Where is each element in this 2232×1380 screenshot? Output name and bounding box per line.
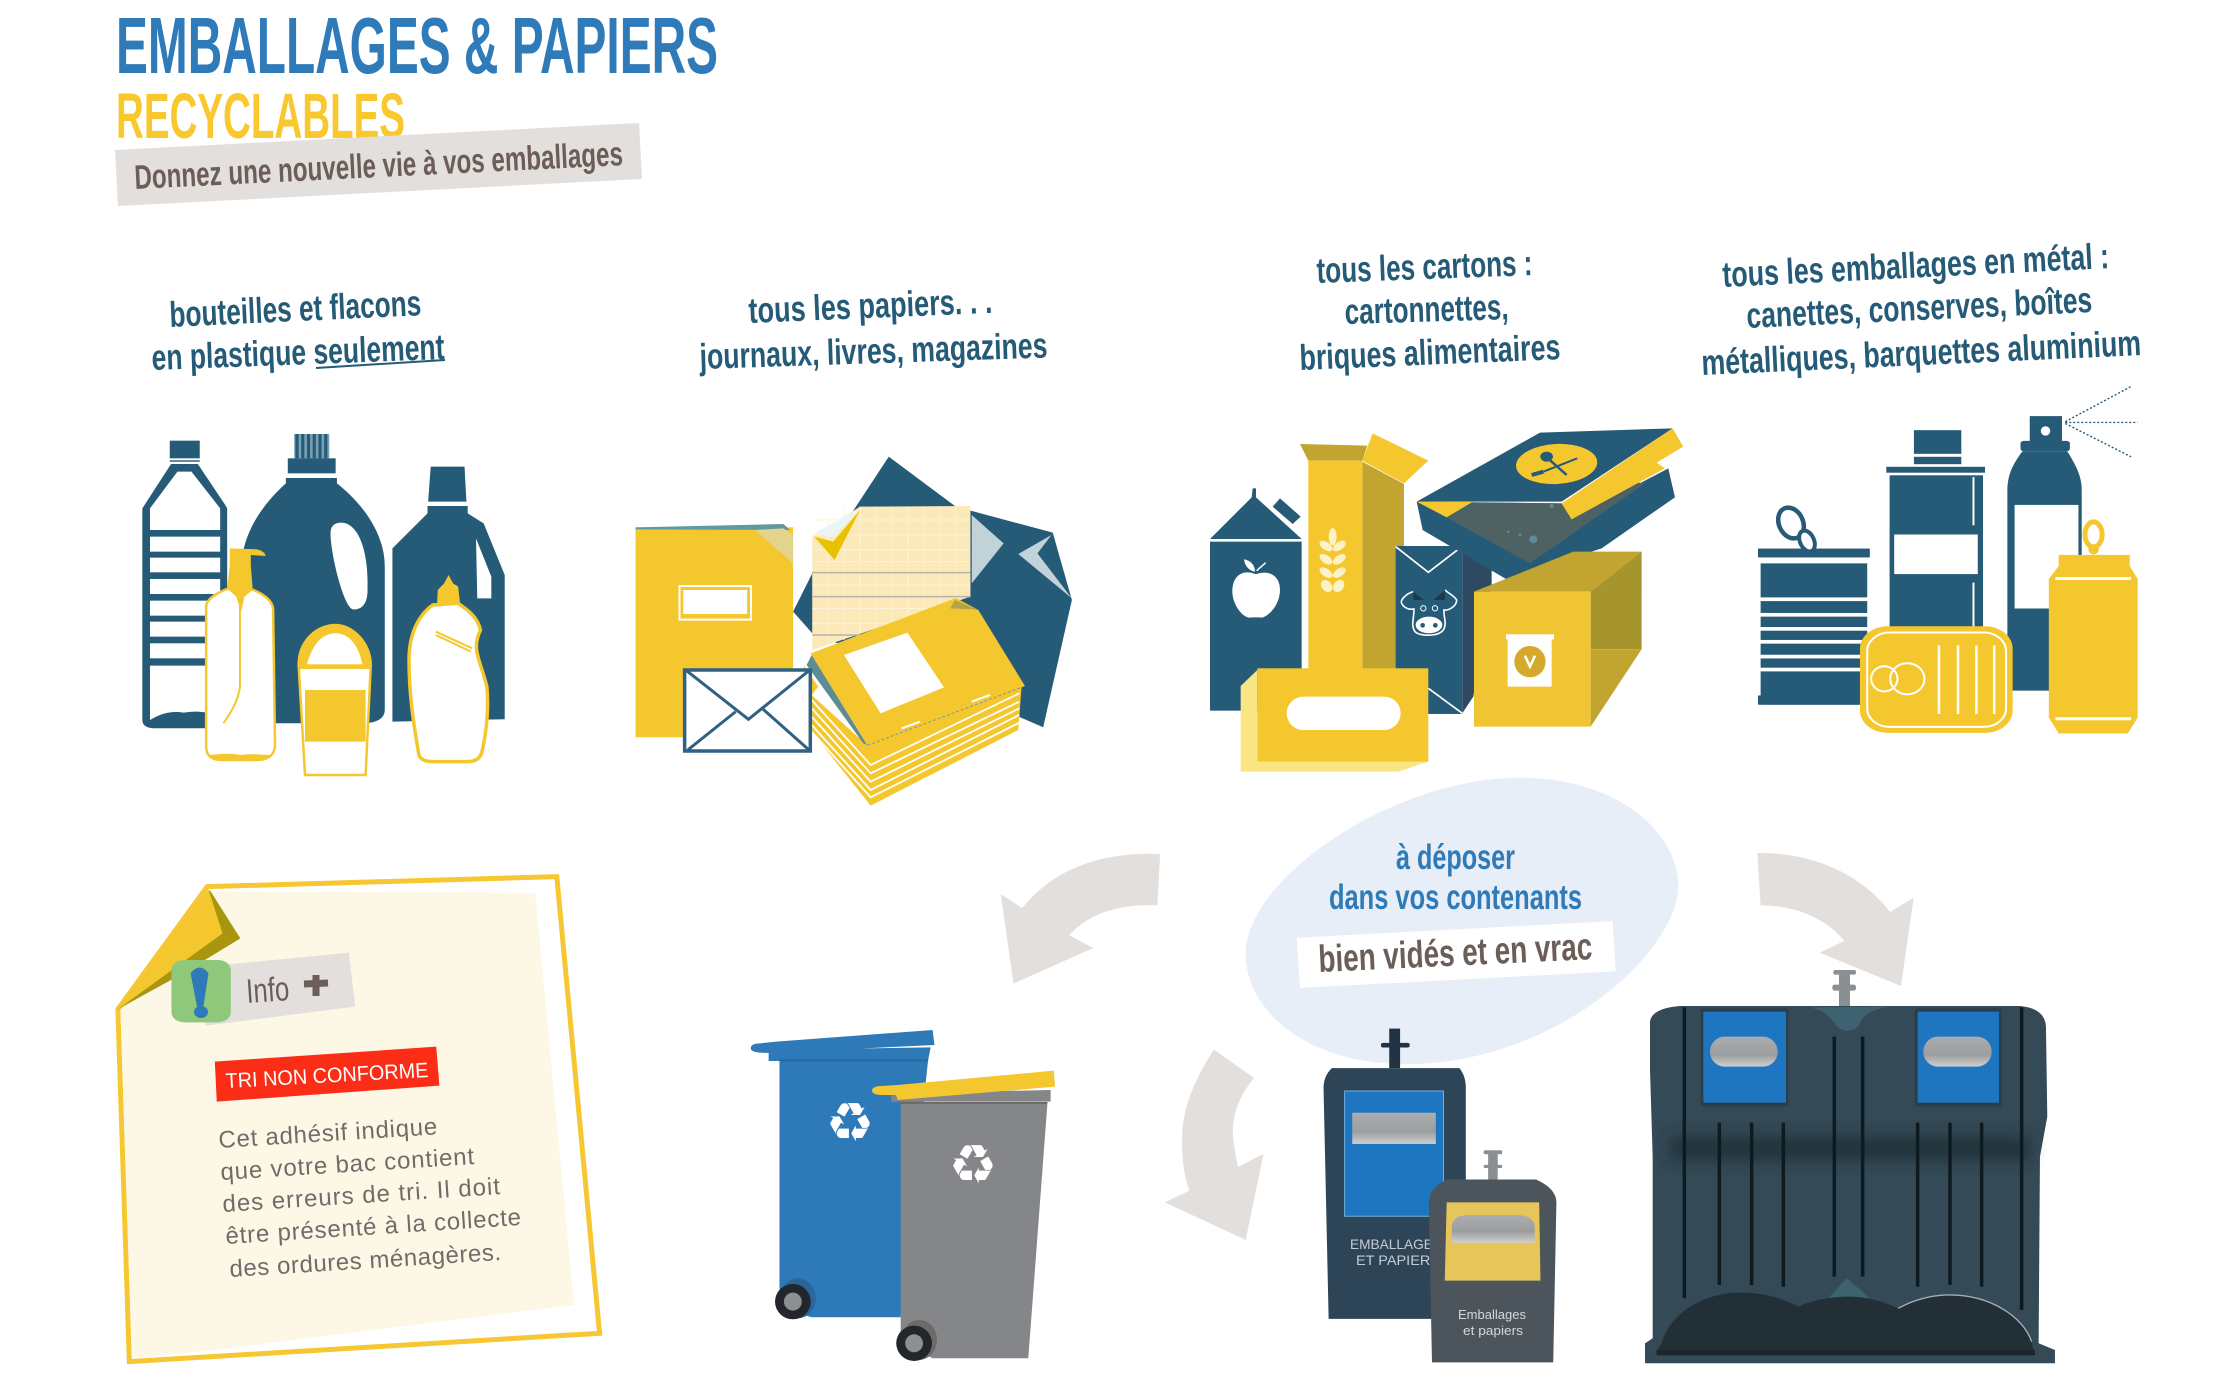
title: EMBALLAGES & PAPIERS <box>116 1 718 90</box>
label: tri non conforme <box>215 1047 439 1102</box>
icon: tall blue container <box>1324 1029 1466 1319</box>
heading: plastic: bouteilles et flacons <box>168 282 422 335</box>
heading: metal <box>1701 235 2142 383</box>
note body text: Cet adhésif indique <box>218 1113 438 1154</box>
note body text: que votre bac contient <box>220 1143 475 1186</box>
heading: cartons: briques alimentaires <box>1299 326 1561 378</box>
icon: wheeled bins: ♻ <box>826 1091 874 1154</box>
subtitle band: Donnez une nouvelle vie à vos emballages <box>134 135 624 197</box>
arrow: to small containers <box>1165 1050 1264 1240</box>
panel: speech bubble: à déposer <box>1396 838 1515 877</box>
icon: small yellow container: Emballages <box>1458 1307 1526 1322</box>
info badge: Info <box>245 970 290 1011</box>
note body text: être présenté à la collecte <box>225 1204 522 1250</box>
heading: metal: canettes, conserves, boîtes <box>1745 279 2093 336</box>
panel: speech bubble <box>1246 778 1678 1064</box>
arrow: to collective containers <box>1757 853 1914 986</box>
heading: cartons: cartonnettes, <box>1344 286 1509 332</box>
icon: tall blue container: EMBALLAGES <box>1350 1236 1442 1252</box>
heading: metal: tous les emballages en métal : <box>1721 235 2110 295</box>
icon: wheat <box>1318 528 1348 594</box>
panel: speech bubble: dans vos contenants <box>1329 878 1582 917</box>
heading: papers: tous les papiers. . . <box>748 280 993 331</box>
icon: folded corner <box>118 889 240 1009</box>
icon: cow <box>1401 590 1457 635</box>
icon: cartons <box>1210 428 1683 772</box>
icon: wheeled bins: ♻ <box>949 1133 997 1196</box>
icon: wheeled bins <box>751 1030 1055 1361</box>
icon: collective container <box>1645 970 2055 1363</box>
info badge <box>171 953 355 1026</box>
title: RECYCLABLES <box>116 80 405 152</box>
note body text <box>218 1113 522 1283</box>
heading: papers: journaux, livres, magazines <box>698 324 1048 377</box>
panel: info note <box>118 877 600 1362</box>
icon: tall blue container: ET PAPIERS <box>1356 1252 1440 1268</box>
heading: plastic: en plastique seulement <box>151 326 445 378</box>
note body text: des erreurs de tri. Il doit <box>222 1173 501 1218</box>
icon: metal packaging <box>1758 386 2138 734</box>
subtitle band <box>115 123 642 206</box>
arrow: to wheeled bins <box>1001 854 1160 984</box>
heading: plastic <box>151 282 445 378</box>
heading: cartons <box>1299 242 1561 378</box>
label: tri non conforme: TRI NON CONFORME <box>225 1059 429 1093</box>
note body text: des ordures ménagères. <box>229 1239 502 1283</box>
title <box>116 1 718 152</box>
icon: plastic bottles <box>142 434 505 775</box>
icon: small yellow container: et papiers <box>1463 1323 1524 1338</box>
heading: papers <box>698 280 1048 377</box>
panel: speech bubble: bien vidés et en vrac <box>1317 926 1593 981</box>
icon: papers <box>636 457 1072 806</box>
heading: cartons: tous les cartons : <box>1316 242 1533 291</box>
icon: small yellow container <box>1429 1150 1556 1362</box>
